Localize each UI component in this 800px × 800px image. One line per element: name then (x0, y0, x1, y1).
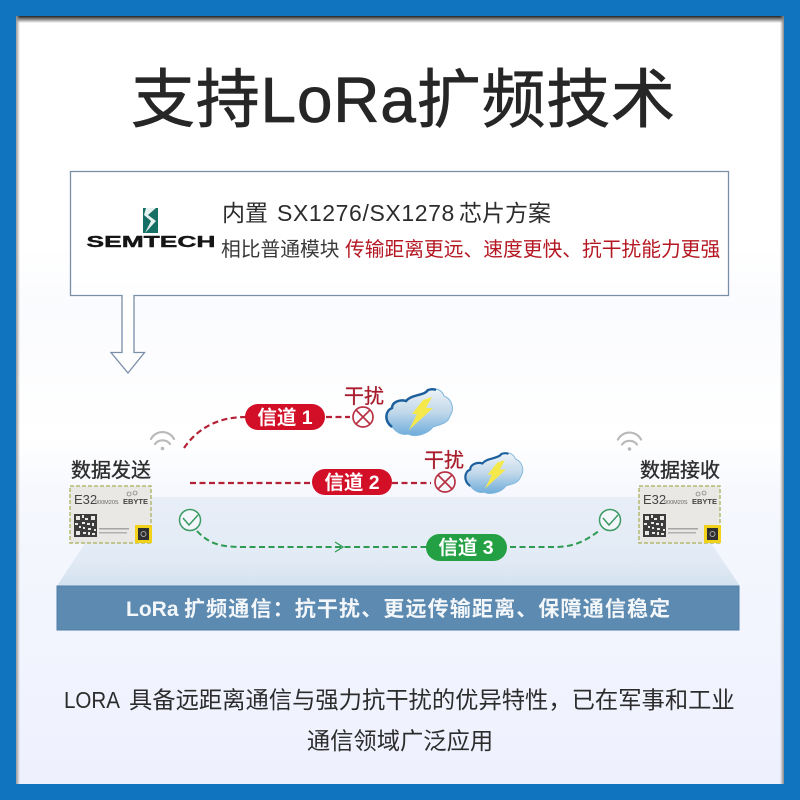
banner: 扩频通信：抗干扰、更远传输距离、保障通信稳定 (184, 597, 671, 621)
channel 3 (180, 510, 620, 561)
perspective platform (57, 497, 740, 586)
description (64, 687, 735, 754)
channel 2 (190, 449, 464, 495)
antenna connector (135, 525, 152, 543)
banner (57, 586, 739, 630)
chip headline: 芯片方案 (459, 200, 551, 226)
title: 支持LoRa扩频技术 (131, 64, 675, 136)
channel 3 pill (426, 534, 507, 561)
qr code (643, 514, 666, 537)
cloud 1 (386, 389, 452, 436)
channel 2 pill (312, 469, 392, 495)
antenna connector (704, 525, 721, 543)
semtech logo: SEMTECH (86, 234, 216, 251)
banner: LoRa (126, 598, 179, 621)
module: receiver: 900M20S (664, 500, 688, 506)
channel 1 pill: 信道 1 (257, 406, 313, 429)
check icon: receiver side (600, 510, 620, 530)
interference label 1: 干扰 (344, 385, 384, 408)
callout panel: chip (70, 172, 728, 373)
receiver label: 数据接收 (640, 459, 720, 482)
comparison line: 传输距离更远、速度更快、抗干扰能力更强 (345, 239, 721, 261)
description: 具备远距离通信与强力抗干扰的优异特性，已在军事和工业 (129, 687, 735, 713)
chip headline: 内置 (222, 200, 268, 226)
interference label 2: 干扰 (424, 449, 464, 472)
cloud 2 (465, 453, 523, 494)
module: receiver: EBYTE (692, 497, 717, 506)
sender label: 数据发送 (71, 459, 151, 482)
module: receiver (639, 486, 721, 543)
comparison line: 相比普通模块 (221, 239, 340, 261)
module: sender: 900M20S (95, 500, 119, 506)
flow arrow (335, 542, 343, 552)
qr code (74, 514, 97, 537)
description: LORA (64, 687, 121, 713)
module: sender: EBYTE (123, 497, 148, 506)
wifi icon: sender (151, 432, 174, 450)
wifi icon: receiver (618, 433, 641, 451)
chip headline: SX1276/SX1278 (277, 200, 455, 226)
module: sender (70, 486, 152, 543)
blocked icon 2 (435, 472, 455, 492)
blocked icon 1 (353, 407, 373, 427)
channel 2 pill: 信道 2 (324, 471, 380, 494)
callout box with arrow (70, 172, 728, 373)
module: sender: E32 (74, 492, 97, 507)
channel 1 (184, 385, 384, 448)
semtech logo (86, 208, 216, 251)
module: receiver: E32 (643, 492, 666, 507)
description: 通信领域广泛应用 (307, 728, 493, 754)
channel 1 pill (245, 404, 325, 430)
check icon: sender side (180, 510, 200, 530)
channel 3 pill: 信道 3 (438, 536, 494, 559)
